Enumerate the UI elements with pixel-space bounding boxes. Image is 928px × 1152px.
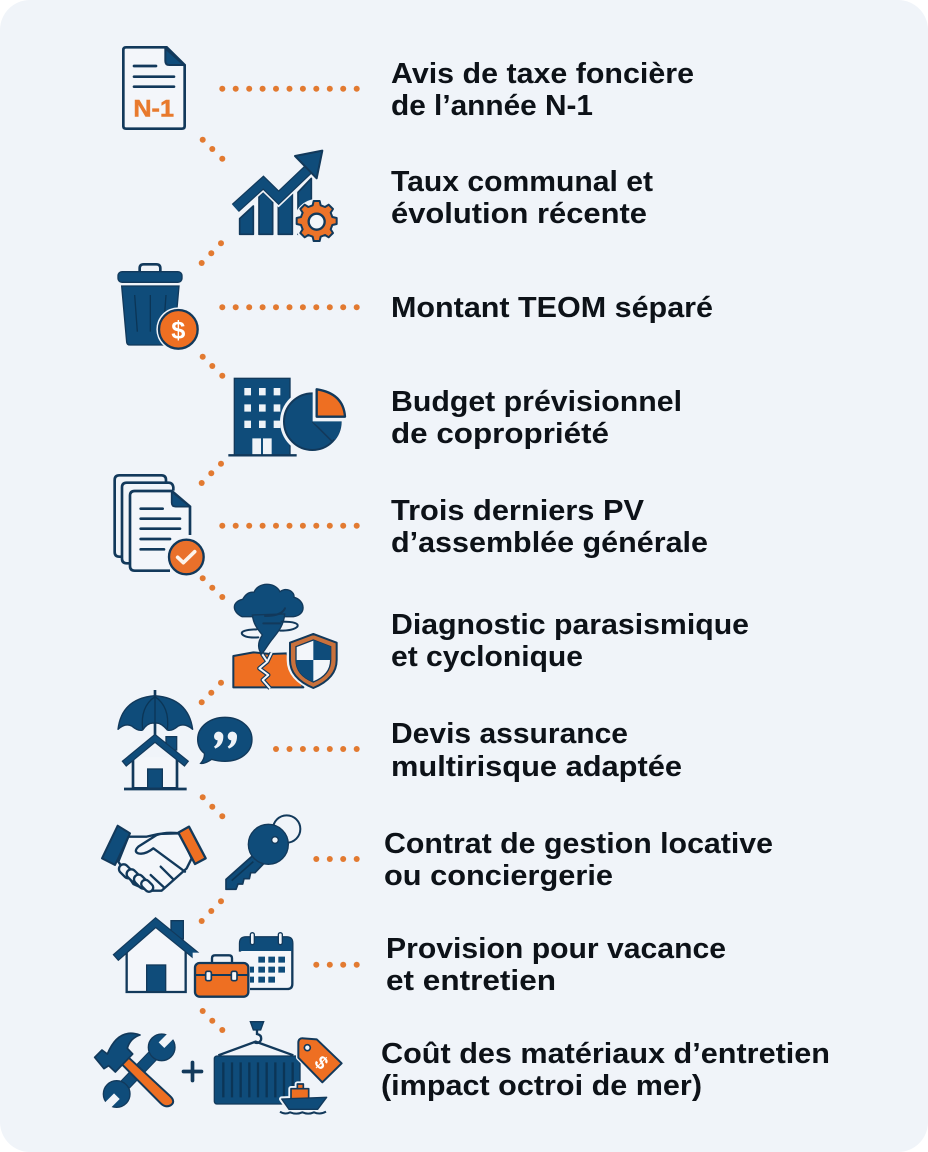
text: Diagnostic: et cyclonique (391, 641, 583, 673)
text: Provision (386, 933, 726, 997)
text: Trois derniers PV (391, 495, 708, 559)
icon: stack of documents with check (115, 475, 206, 577)
text: Budget prévisionnel: Budget prévisionnel (391, 386, 682, 418)
text: Coût des matériaux (381, 1038, 830, 1102)
icon: house (119, 921, 193, 992)
text: Coût des matériaux: (impact octroi de mer) (381, 1070, 702, 1102)
text: Diagnostic (391, 609, 749, 673)
icon: cyclone over cracked ground with shield (233, 584, 340, 691)
icon: building with pie chart (228, 378, 350, 455)
text: Taux communal: Taux communal et (391, 166, 654, 198)
connectors: horizontal and diagonal dotted lines (199, 86, 360, 1033)
text: Devis assurance: multirisque adaptée (391, 751, 682, 783)
text: Coût des matériaux: Coût des matériaux d’entretien (381, 1038, 830, 1070)
text: Taux communal (391, 166, 654, 230)
icon: trash bin with dollar badge (118, 264, 200, 351)
icon: handshake (102, 826, 206, 893)
icon: growth chart with gear (235, 151, 339, 244)
icon: trash bin with dollar badge: $ (171, 316, 185, 344)
icon: container on hook with price tag and boat: $ (310, 1051, 333, 1074)
text: Trois derniers PV: Trois derniers PV (391, 495, 644, 527)
text: Contrat de gestion: ou conciergerie (384, 860, 613, 892)
text: Diagnostic: Diagnostic parasismique (391, 609, 749, 641)
text: Devis assurance: Devis assurance (391, 718, 628, 750)
text: Avis de taxe foncière: Avis de taxe foncière (391, 58, 694, 90)
text: Avis de taxe foncière (391, 58, 694, 122)
icon: tax notice document N-1: N-1 (133, 95, 174, 122)
text: Montant TEOM: Montant TEOM séparé (391, 292, 713, 324)
text: Contrat de gestion (384, 828, 773, 892)
icon: container on hook with price tag and boat (214, 1022, 342, 1114)
icon: plus sign (184, 1062, 202, 1080)
icon: tax notice document N-1 (123, 47, 185, 129)
icon: calendar and toolbox (193, 933, 292, 999)
icon: key with ring (226, 815, 300, 889)
text: Budget prévisionnel: de copropriété (391, 418, 609, 450)
text: Contrat de gestion: Contrat de gestion locative (384, 828, 773, 860)
text: Budget prévisionnel (391, 386, 682, 450)
text: Trois derniers PV: d’assemblée générale (391, 527, 708, 559)
text: Provision: Provision pour vacance (386, 933, 726, 965)
text: Taux communal: évolution récente (391, 198, 647, 230)
text: Avis de taxe foncière: de l’année N-1 (391, 90, 593, 122)
icon: hammer and wrench (95, 1032, 175, 1109)
text: Provision: et entretien (386, 965, 556, 997)
text: Devis assurance (391, 718, 682, 783)
icon: umbrella over house with quote bubble (118, 690, 252, 789)
